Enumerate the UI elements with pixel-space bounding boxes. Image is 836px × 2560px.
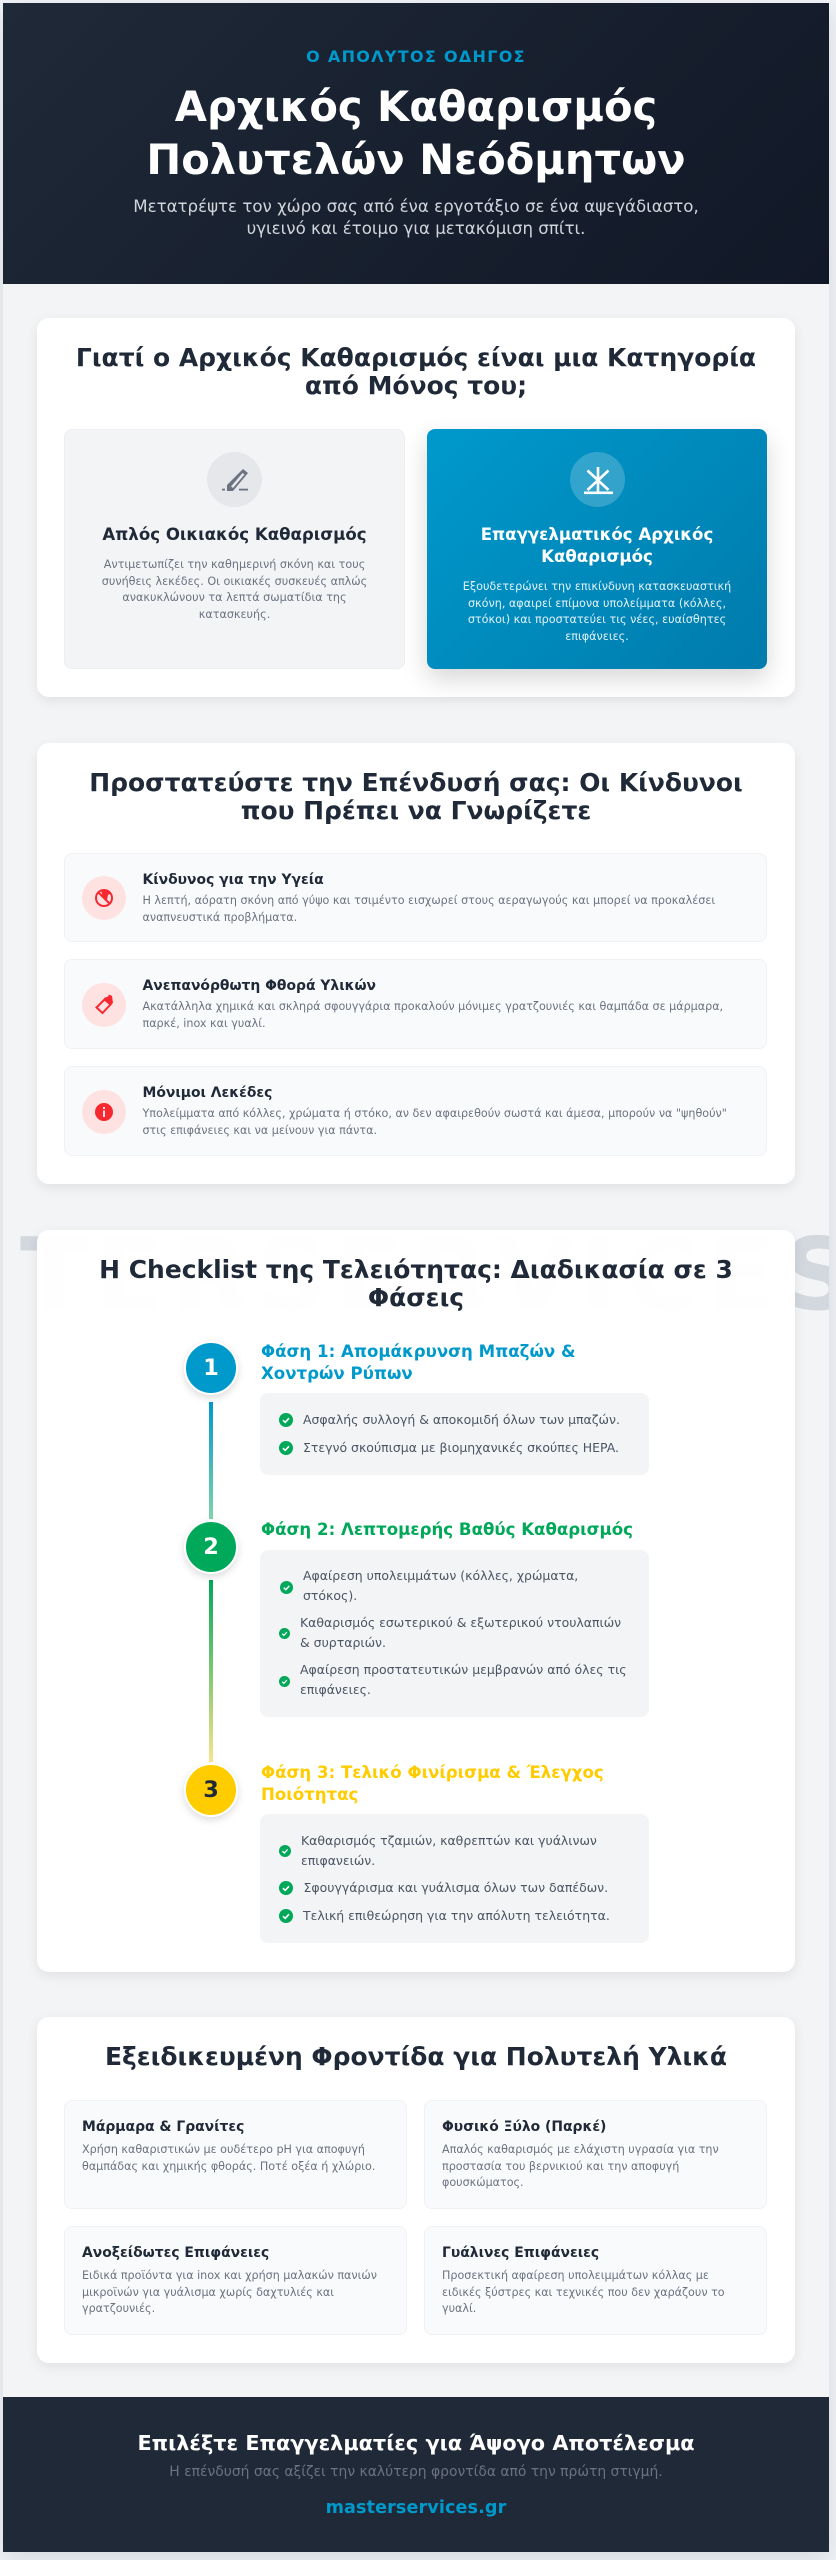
list item: Καθαρισμός τζαμιών, καθρεπτών και γυάλινων — [301, 1833, 597, 1848]
phase 1 title: Φάση 1: Απομάκρυνση Μπαζών & — [261, 1342, 575, 1361]
icon: stains — [82, 1090, 126, 1134]
heading: checklist: Η Checklist της Τελειότητας: Διαδικασία σε 3 — [99, 1255, 733, 1284]
text: marble: θαμπάδας και χημικής φθοράς. Ποτέ οξέα ή χλώριο. — [82, 2160, 375, 2173]
check icon — [279, 1441, 293, 1455]
text: professional cleaning — [463, 580, 731, 643]
text: stainless: Ειδικά προϊόντα για inox και χρήση μαλακών πανιών — [82, 2269, 377, 2282]
icon: health — [82, 876, 126, 920]
heading: stainless: Ανοξείδωτες Επιφάνειες — [82, 2245, 269, 2261]
title: Αρχικός Καθαρισμός — [175, 82, 657, 131]
text: stainless: γρατζουνιές. — [82, 2302, 155, 2315]
card: glass — [424, 2226, 767, 2335]
text: marble: Χρήση καθαριστικών με ουδέτερο pH για αποφυγή — [82, 2143, 365, 2156]
phase 3 list box — [260, 1814, 649, 1943]
heading: wood: Φυσικό Ξύλο (Παρκέ) — [442, 2119, 606, 2135]
heading: checklist — [99, 1255, 733, 1312]
phase 3 title: Φάση 3: Τελικό Φινίρισμα & Έλεγχος — [261, 1763, 604, 1782]
heading: health: Κίνδυνος για την Υγεία — [142, 872, 324, 888]
text: glass: γυαλί. — [442, 2302, 476, 2315]
check icon — [279, 1845, 291, 1857]
check icon — [280, 1581, 293, 1594]
text: professional cleaning: σκόνη, αφαιρεί επίμονα υπολείμματα (κόλλες, — [468, 597, 726, 610]
list item: στόκος). — [303, 1588, 357, 1603]
card: wood — [424, 2100, 767, 2209]
header — [3, 3, 829, 284]
phase 2 list box — [260, 1550, 649, 1717]
text: professional cleaning: επιφάνειες. — [565, 630, 629, 643]
check icon — [279, 1676, 290, 1687]
text: simple cleaning: Αντιμετωπίζει την καθημερινή σκόνη και τους — [104, 558, 365, 571]
list item: Αφαίρεση υπολειμμάτων (κόλλες, χρώματα, — [303, 1568, 578, 1583]
card: stainless — [64, 2226, 407, 2335]
check icon — [279, 1909, 293, 1923]
step number 2: 2 — [203, 1534, 219, 1560]
heading: marble: Μάρμαρα & Γρανίτες — [82, 2119, 244, 2135]
check icon — [279, 1413, 293, 1427]
list item — [301, 1833, 597, 1868]
panel: materials — [37, 2017, 795, 2363]
step number 3: 3 — [203, 1777, 219, 1803]
text: damage: Ακατάλληλα χημικά και σκληρά σφουγγάρια προκαλούν μόνιμες γρατζουνιές και θαμπάδα σε μάρμαρα, — [142, 1000, 723, 1013]
text: glass — [442, 2269, 725, 2315]
text: stainless — [82, 2269, 377, 2315]
text: glass: Προσεκτική αφαίρεση υπολειμμάτων κόλλας με — [442, 2269, 709, 2282]
list item: Ασφαλής συλλογή & αποκομιδή όλων των μπαζών. — [303, 1412, 620, 1427]
text: marble — [82, 2143, 375, 2173]
row: permanent stains — [64, 1066, 767, 1156]
card: professional cleaning — [427, 429, 767, 669]
text: damage — [142, 1000, 723, 1030]
connector: phase 1 to 2 — [209, 1402, 213, 1519]
text: wood: προστασία του βερνικιού και την αποφυγή — [442, 2160, 679, 2173]
text: health: Η λεπτή, αόρατη σκόνη από γύψο και τσιμέντο εισχωρεί στους αεραγωγούς και μπορεί να προκαλέσει — [142, 894, 715, 907]
list item — [303, 1568, 578, 1603]
text: stains: στις επιφάνειες και να μείνουν για πάντα. — [142, 1124, 377, 1137]
phase 3 title — [261, 1763, 604, 1804]
text: simple cleaning: συνήθεις λεκέδες. Οι οικιακές συσκευές απλώς — [102, 575, 367, 588]
subtitle: υγιεινό και έτοιμο για μετακόμιση σπίτι. — [247, 219, 585, 238]
text: health — [142, 894, 715, 924]
panel: risks — [37, 743, 795, 1184]
text: simple cleaning: κατασκευής. — [199, 608, 270, 621]
text: professional cleaning: Εξουδετερώνει την επικίνδυνη κατασκευαστική — [463, 580, 731, 593]
title — [146, 82, 686, 184]
text: wood: Απαλός καθαρισμός με ελάχιστη υγρασία για την — [442, 2143, 719, 2156]
connector: phase 2 to 3 — [209, 1580, 213, 1762]
phase 2 title: Φάση 2: Λεπτομερής Βαθύς Καθαρισμός — [261, 1520, 633, 1539]
icon: pen — [207, 452, 262, 507]
row: material damage — [64, 959, 767, 1049]
phase 1 title — [261, 1342, 575, 1383]
check icon — [279, 1628, 290, 1639]
card: simple home cleaning — [64, 429, 405, 669]
heading: professional cleaning: Καθαρισμός — [541, 547, 653, 566]
heading: risks: Προστατεύστε την Επένδυσή σας: Οι Κίνδυνοι — [89, 768, 743, 797]
card: marble — [64, 2100, 407, 2209]
icon: sparkle — [570, 452, 625, 507]
text: glass: ειδικές ξύστρες και τεχνικές που δεν χαράζουν το — [442, 2286, 725, 2299]
phase 3 title: Ποιότητας — [261, 1785, 358, 1804]
text: stains — [142, 1107, 727, 1137]
heading: professional cleaning — [481, 525, 713, 566]
subtitle: Μετατρέψτε τον χώρο σας από ένα εργοτάξιο σε ένα αψεγάδιαστο, — [133, 197, 699, 216]
eyebrow: Ο ΑΠΟΛΥΤΟΣ ΟΔΗΓΟΣ — [306, 47, 526, 66]
text: stains: Υπολείμματα από κόλλες, χρώματα ή στόκο, αν δεν αφαιρεθούν σωστά και άμεσα, μπορούν να "ψηθούν" — [142, 1107, 727, 1120]
text: health: αναπνευστικά προβλήματα. — [142, 911, 297, 924]
footer — [3, 2397, 829, 2552]
step number 1 — [184, 1341, 238, 1395]
text: simple cleaning — [102, 558, 367, 621]
heading: glass: Γυάλινες Επιφάνειες — [442, 2245, 599, 2261]
heading: why: από Μόνος του; — [305, 371, 527, 400]
footer subtitle: Η επένδυσή σας αξίζει την καλύτερη φροντίδα από την πρώτη στιγμή. — [169, 2464, 663, 2480]
text: wood — [442, 2143, 719, 2189]
heading: stains: Μόνιμοι Λεκέδες — [142, 1085, 272, 1101]
heading: simple cleaning: Απλός Οικιακός Καθαρισμός — [102, 525, 367, 544]
footer title: Επιλέξτε Επαγγελματίες για Άψογο Αποτέλεσμα — [137, 2431, 695, 2455]
panel: why a separate category — [37, 318, 795, 697]
list item: Στεγνό σκούπισμα με βιομηχανικές σκούπες HEPA. — [303, 1440, 619, 1455]
panel: checklist — [37, 1230, 795, 1972]
text: damage: παρκέ, inox και γυαλί. — [142, 1017, 266, 1030]
heading: why: Γιατί ο Αρχικός Καθαρισμός είναι μια Κατηγορία — [76, 343, 756, 372]
icon: damage — [82, 983, 126, 1027]
title: Πολυτελών Νεόδμητων — [146, 135, 686, 184]
check icon — [279, 1881, 293, 1895]
list item: Αφαίρεση προστατευτικών μεμβρανών από όλες τις — [300, 1662, 627, 1677]
list item — [300, 1615, 621, 1650]
list item: επιφανειών. — [301, 1853, 375, 1868]
list item: επιφάνειες. — [300, 1682, 371, 1697]
text: simple cleaning: ανακυκλώνουν τα λεπτά σωματίδια της — [122, 591, 347, 604]
heading: checklist: Φάσεις — [368, 1283, 464, 1312]
heading: materials: Εξειδικευμένη Φροντίδα για Πολυτελή Υλικά — [105, 2042, 727, 2071]
subtitle — [133, 197, 699, 238]
list item: & συρταριών. — [300, 1635, 386, 1650]
step number 2 — [184, 1520, 238, 1574]
list item: Σφουγγάρισμα και γυάλισμα όλων των δαπέδων. — [304, 1880, 608, 1895]
text: professional cleaning: στόκοι) και προστατεύει τις νέες, ευαίσθητες — [468, 613, 726, 626]
step number 3 — [184, 1763, 238, 1817]
row: health risk — [64, 853, 767, 942]
list item: Τελική επιθεώρηση για την απόλυτη τελειότητα. — [303, 1908, 610, 1923]
list item — [300, 1662, 627, 1697]
list item: Καθαρισμός εσωτερικού & εξωτερικού ντουλαπιών — [300, 1615, 621, 1630]
text: stainless: μικροϊνών για γυάλισμα χωρίς δαχτυλιές και — [82, 2286, 334, 2299]
heading: damage: Ανεπανόρθωτη Φθορά Υλικών — [142, 978, 376, 994]
heading: risks — [89, 768, 743, 825]
phase 1 list box — [260, 1393, 649, 1475]
text: wood: φουσκώματος. — [442, 2176, 524, 2189]
footer link: masterservices.gr — [326, 2498, 506, 2518]
phase 1 title: Χοντρών Ρύπων — [261, 1364, 413, 1383]
heading: why — [76, 343, 756, 400]
step number 1: 1 — [203, 1355, 219, 1381]
heading: professional cleaning: Επαγγελματικός Αρχικός — [481, 525, 713, 544]
heading: risks: που Πρέπει να Γνωρίζετε — [241, 796, 591, 825]
